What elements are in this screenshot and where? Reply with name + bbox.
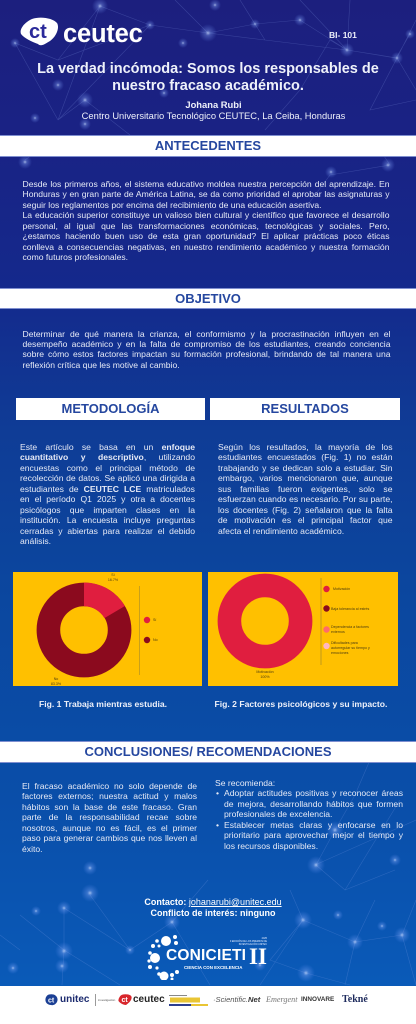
text: recomendaciones xyxy=(215,778,403,851)
text: antecedentes: seguir los reglamentos por encima del recibimiento de una educación asertiva. xyxy=(22,200,322,210)
text: objetivo: Determinar de qué manera la crianza, el conformismo y la procrastinación influyen en el xyxy=(22,328,390,338)
text: resultados: afecta el rendimiento académico. xyxy=(218,526,344,536)
donut xyxy=(218,574,330,668)
legend: dificultades: Dificultades para xyxy=(331,641,358,645)
logo: ceutec: ceutec xyxy=(133,994,165,1005)
text: antecedentes: Honduras y en gran parte de América Latina, se da como prioridad el aprobar las asignaturas y xyxy=(22,189,390,199)
legend: no: No xyxy=(153,638,158,642)
author: Johana Rubi xyxy=(185,99,242,110)
text: recomendaciones: Se recomienda: xyxy=(215,778,275,788)
heading: metodología xyxy=(16,398,205,420)
text: resultados xyxy=(218,442,393,536)
dots emblem xyxy=(147,935,179,980)
divider label: investigación: investigación xyxy=(98,998,115,1002)
text: objetivo xyxy=(22,328,391,370)
text: metodología: análisis. xyxy=(20,536,51,546)
logo: ceutec xyxy=(20,18,143,48)
text: resultados: de motivación es el principal factor que xyxy=(218,515,392,525)
logo: ceutec xyxy=(118,994,165,1005)
text: metodología: Este artículo se basa en un enfoque xyxy=(20,442,195,452)
text: metodología: institución. La encuesta incluye preguntas xyxy=(20,515,195,525)
chart: trabaja mientras estudia xyxy=(13,572,202,686)
text: recomendaciones: de mejora, desarrollando hábitos que formen xyxy=(224,799,403,809)
footer: sponsors xyxy=(0,986,416,1024)
logo: conicieti II xyxy=(147,935,267,980)
text: objetivo: sobre cómo estos factores impactan su formación profesional, brindando de tal manera una xyxy=(22,349,390,359)
text: resultados: trabajando y se dedican solo a estudiar. Sin xyxy=(218,463,392,473)
edition note xyxy=(230,937,267,946)
text: conclusiones: hábitos son la base de este fracaso. Gran xyxy=(22,802,197,812)
legend: baja tolerancia: Baja tolerancia al estrés xyxy=(331,606,369,610)
text: metodología: encuestas como el principal método de xyxy=(20,463,195,473)
legend: dificultades: emociones xyxy=(331,651,348,655)
text: antecedentes: personal, al igual que las transformaciones económicas, tecnológicas y sociales. Pero, xyxy=(22,221,390,231)
heading: antecedentes: ANTECEDENTES xyxy=(155,138,261,153)
text: antecedentes: como futuros profesionales. xyxy=(22,252,128,262)
text: metodología xyxy=(20,442,196,546)
text: antecedentes: conlleva a consecuencias negativas, en nuestro rendimiento académico y nuestra formación xyxy=(22,242,390,252)
text: conclusiones: nosotros, aunque no es fácil, es el primer xyxy=(22,823,197,833)
caption: figura 1: Fig. 1 Trabaja mientras estudia. xyxy=(39,699,167,709)
heading: antecedentes xyxy=(0,135,416,157)
text: antecedentes xyxy=(22,179,390,262)
text: resultados: sus familias fueron exigentes, solo se xyxy=(218,484,392,494)
text: conclusiones xyxy=(22,781,197,854)
logo: ceutec: ct xyxy=(122,997,128,1004)
label: motivación xyxy=(256,670,274,679)
heading: resultados xyxy=(210,398,400,420)
heading: objetivo: OBJETIVO xyxy=(175,291,241,306)
logo: emergent: Emergent xyxy=(266,995,298,1004)
edition note: 2025 xyxy=(262,937,267,940)
legend: dependencia: Dependencia a factores xyxy=(331,625,369,629)
text: conclusiones: El fracaso académico no solo depende de xyxy=(22,781,197,791)
contact xyxy=(144,897,282,918)
logo: yellow journal mark xyxy=(169,995,208,1006)
text: conclusiones: factores externos; nuestra actitud y malos xyxy=(22,791,197,801)
donut xyxy=(36,582,150,678)
text: metodología: estudiantes de CEUTEC LCE matriculados xyxy=(20,484,195,494)
text: resultados: esfuerzan cuando es necesario. Por su parte, xyxy=(218,494,392,504)
text: metodología: recolección de datos. Se aplicó una dirigida a xyxy=(20,473,195,483)
logo: unitec: ct xyxy=(48,998,55,1004)
label: sí xyxy=(108,573,118,582)
text: metodología: cuantitativo y descriptivo, utilizando xyxy=(20,452,195,462)
logo wordmark: ceutec xyxy=(63,20,143,48)
logo mark: ct xyxy=(29,21,47,43)
legend: sí: Sí xyxy=(153,618,156,622)
text: conclusiones: parte de la responsabilidad recae sobre xyxy=(22,812,197,822)
poster code: BI- 101 xyxy=(329,30,357,40)
text: resultados: los docentes (Fig. 2) señalaron que la falta xyxy=(218,505,392,515)
edition note: II EDICIÓN DE LOS PREMIOS DE xyxy=(230,940,267,943)
logo: unitec xyxy=(45,994,90,1006)
logo: tekné: Tekné xyxy=(342,994,368,1005)
text: antecedentes: ¿estamos haciendo buen uso de esta gran oportunidad? El aplicar prácticas poco éticas xyxy=(22,231,390,241)
label: no: No xyxy=(54,677,58,681)
affiliation: Centro Universitario Tecnológico CEUTEC, La Ceiba, Honduras xyxy=(82,110,345,120)
contact: Contacto: johanarubi@unitec.edu xyxy=(144,897,282,907)
roman numeral: II xyxy=(249,944,267,969)
tagline: CIENCIA CON EXCELENCIA xyxy=(184,965,242,970)
text: antecedentes: Desde los primeros años, el sistema educativo moldea nuestra percepción del aprendizaje. En xyxy=(22,179,390,189)
logo: innovare: INNOVARE xyxy=(301,996,334,1003)
text: objetivo: desempeño académico y en la falta de compromiso de los estudiantes, creando conciencia xyxy=(22,339,390,349)
text: conclusiones: paso para generar cambios que nos lleven al xyxy=(22,833,197,843)
label: no: 83.3% xyxy=(51,682,61,686)
text: metodología: cerradas y abiertas para realizar el debido xyxy=(20,526,195,536)
text: antecedentes: La educación superior constituye un valioso bien cultural y científico que favorece el desarrollo xyxy=(22,210,390,220)
text: metodología: psicólogos que imparten clases en la xyxy=(20,505,195,515)
caption: figura 2: Fig. 2 Factores psicológicos y su impacto. xyxy=(214,699,387,709)
text: recomendaciones: Establecer metas claras y enfocarse en lo xyxy=(224,820,403,830)
conicieti wordmark: CONICIETI xyxy=(166,947,246,964)
text: resultados: Según los resultados, la mayoría de los xyxy=(218,442,392,452)
logo mark xyxy=(20,18,58,46)
chart: factores psicológicos xyxy=(208,572,398,686)
heading: conclusiones xyxy=(0,741,416,763)
label: no xyxy=(51,677,61,686)
legend: dependencia: externos xyxy=(331,630,345,634)
text: recomendaciones: prioritario para aprovechar mejor el tiempo y xyxy=(224,830,403,840)
text: objetivo: reflexión crítica que les motive al cambio. xyxy=(22,360,180,370)
label: motivación: Motivación xyxy=(256,670,274,674)
label: motivación: 100% xyxy=(260,675,270,679)
heading: conclusiones: CONCLUSIONES/ RECOMENDACIONES xyxy=(84,744,332,759)
contact: Conflicto de interés: ninguno xyxy=(150,908,276,918)
logo: unitec: unitec xyxy=(60,994,89,1005)
logo: scientific.net: ·Scientific.Net xyxy=(213,995,260,1004)
legend: dependencia xyxy=(331,625,369,634)
label: sí: Sí xyxy=(111,573,115,577)
text: resultados: embargo, varios mencionaron que, aunque xyxy=(218,473,392,483)
text: resultados: estudiantes encuestados (Fig. 1) no están xyxy=(218,452,392,462)
text: recomendaciones: Adoptar actitudes positivas y reconocer áreas xyxy=(224,788,403,798)
label: sí: 16.7% xyxy=(108,578,118,582)
title: nuestro fracaso académico. xyxy=(112,78,304,94)
heading: metodología: METODOLOGÍA xyxy=(62,401,159,416)
title: La verdad incómoda: Somos los responsables de xyxy=(37,60,379,76)
heading: resultados: RESULTADOS xyxy=(261,401,349,416)
legend: dificultades xyxy=(331,641,370,655)
legend: dificultades: autorregular su tiempo y xyxy=(331,646,370,650)
title xyxy=(37,60,379,94)
text: metodología: en el período Q1 2025 y otra a docentes xyxy=(20,494,195,504)
legend: motivación: Motivación xyxy=(333,587,350,591)
text: recomendaciones: • xyxy=(216,788,219,798)
edition note: INVESTIGACIÓN UNITEC xyxy=(239,943,267,946)
text: recomendaciones: profesionales de excelencia. xyxy=(224,809,332,819)
divider label: investigación xyxy=(95,994,115,1006)
text: conclusiones: éxito. xyxy=(22,844,43,854)
text: recomendaciones: los recursos disponibles. xyxy=(224,841,318,851)
heading: objetivo xyxy=(0,288,416,309)
text: recomendaciones: • xyxy=(216,820,219,830)
